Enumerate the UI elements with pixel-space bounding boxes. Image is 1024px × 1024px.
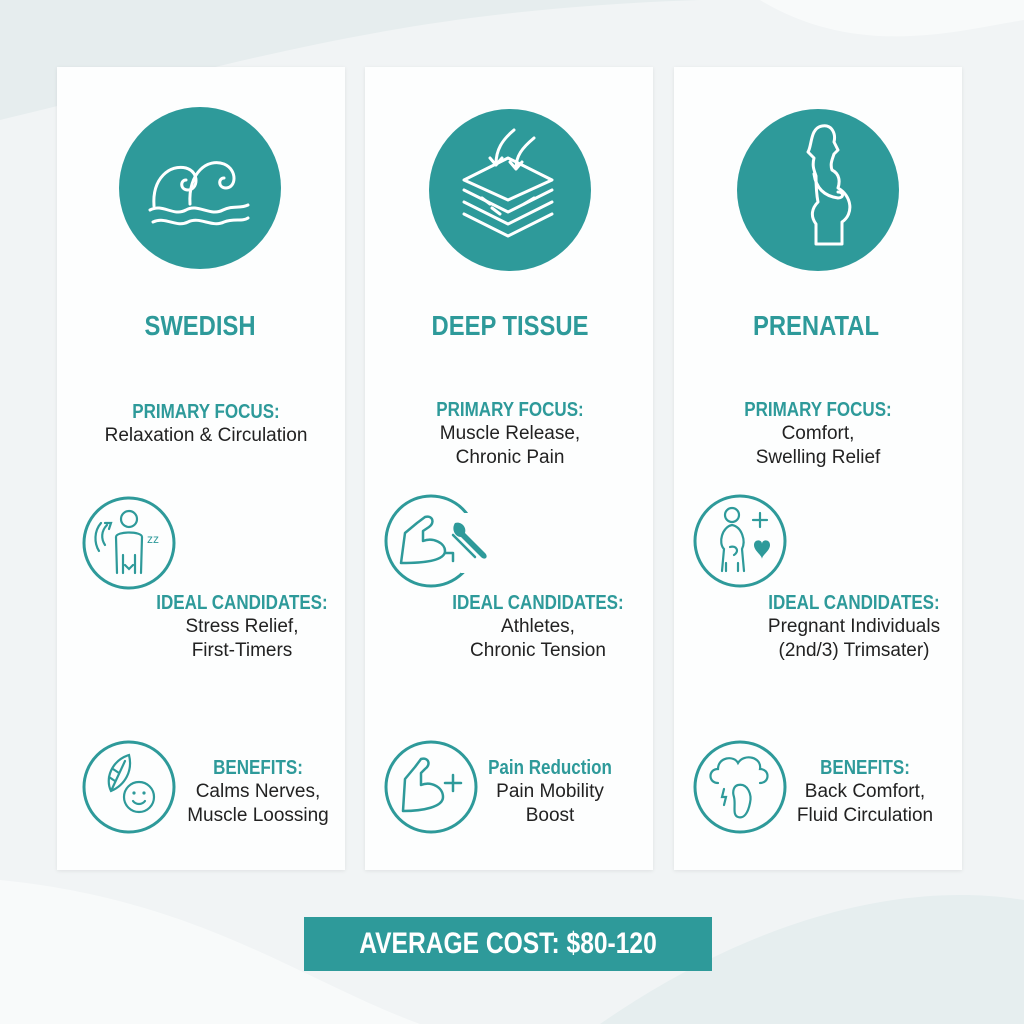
text: prenatal benefits: Fluid Circulation xyxy=(797,805,933,826)
icon: pregnant heart xyxy=(694,494,786,588)
text: deep ideal candidates: IDEAL CANDIDATES: xyxy=(452,591,624,614)
text: prenatal ideal candidates: (2nd/3) Trimsater) xyxy=(778,640,929,661)
text: deep benefits xyxy=(488,756,612,826)
text: prenatal primary focus: Swelling Relief xyxy=(756,447,880,468)
heading: swedish: SWEDISH xyxy=(144,310,256,341)
callout: average cost xyxy=(304,917,712,971)
text: swedish ideal candidates: IDEAL CANDIDATES: xyxy=(156,591,328,614)
text: deep ideal candidates: Chronic Tension xyxy=(470,640,606,661)
text: prenatal benefits xyxy=(797,756,933,826)
text: deep primary focus: Muscle Release, xyxy=(440,423,580,444)
text: prenatal ideal candidates: Pregnant Individuals xyxy=(768,616,940,637)
panel: prenatal xyxy=(674,67,962,870)
text: swedish primary focus xyxy=(105,400,307,446)
icon: relaxed person xyxy=(82,496,176,590)
text: deep primary focus xyxy=(436,398,584,468)
text: swedish primary focus: Relaxation & Circulation xyxy=(105,425,307,446)
icon: leaf smile xyxy=(82,740,176,834)
text: prenatal ideal candidates: IDEAL CANDIDATES: xyxy=(768,591,940,614)
text: prenatal primary focus: Comfort, xyxy=(782,423,854,444)
text: prenatal primary focus: PRIMARY FOCUS: xyxy=(744,398,892,421)
text: swedish benefits xyxy=(187,756,329,826)
text: prenatal benefits: BENEFITS: xyxy=(820,756,910,779)
text: swedish ideal candidates xyxy=(156,591,328,661)
heading: prenatal: PRENATAL xyxy=(753,310,879,341)
panel: deep tissue xyxy=(365,67,653,870)
icon: layers xyxy=(429,109,591,271)
icon: pregnant silhouette xyxy=(737,109,899,271)
text: prenatal ideal candidates xyxy=(768,591,940,661)
heading: deep tissue: DEEP TISSUE xyxy=(432,310,588,341)
icon: relaxed person: zz xyxy=(147,532,159,546)
text: deep primary focus: PRIMARY FOCUS: xyxy=(436,398,584,421)
text: swedish benefits: Muscle Loossing xyxy=(187,805,329,826)
text: prenatal primary focus xyxy=(744,398,892,468)
text: deep primary focus: Chronic Pain xyxy=(456,447,564,468)
text: deep benefits: Pain Reduction xyxy=(488,756,612,779)
text: deep benefits: Pain Mobility xyxy=(496,781,604,802)
text: deep benefits: Boost xyxy=(526,805,574,826)
text: swedish benefits: BENEFITS: xyxy=(213,756,303,779)
text: deep ideal candidates xyxy=(452,591,624,661)
callout: average cost: AVERAGE COST: $80-120 xyxy=(359,927,657,960)
text: prenatal benefits: Back Comfort, xyxy=(805,781,925,802)
icon: muscle plus xyxy=(384,740,478,834)
icon: cloud foot xyxy=(694,740,786,834)
text: deep ideal candidates: Athletes, xyxy=(501,616,575,637)
icon: muscle wrench xyxy=(384,494,487,588)
text: swedish benefits: Calms Nerves, xyxy=(196,781,320,802)
text: swedish primary focus: PRIMARY FOCUS: xyxy=(132,400,280,423)
text: swedish ideal candidates: Stress Relief, xyxy=(186,616,298,637)
icon: waves xyxy=(119,107,281,269)
text: swedish ideal candidates: First-Timers xyxy=(192,640,292,661)
panel: swedish xyxy=(57,67,345,870)
